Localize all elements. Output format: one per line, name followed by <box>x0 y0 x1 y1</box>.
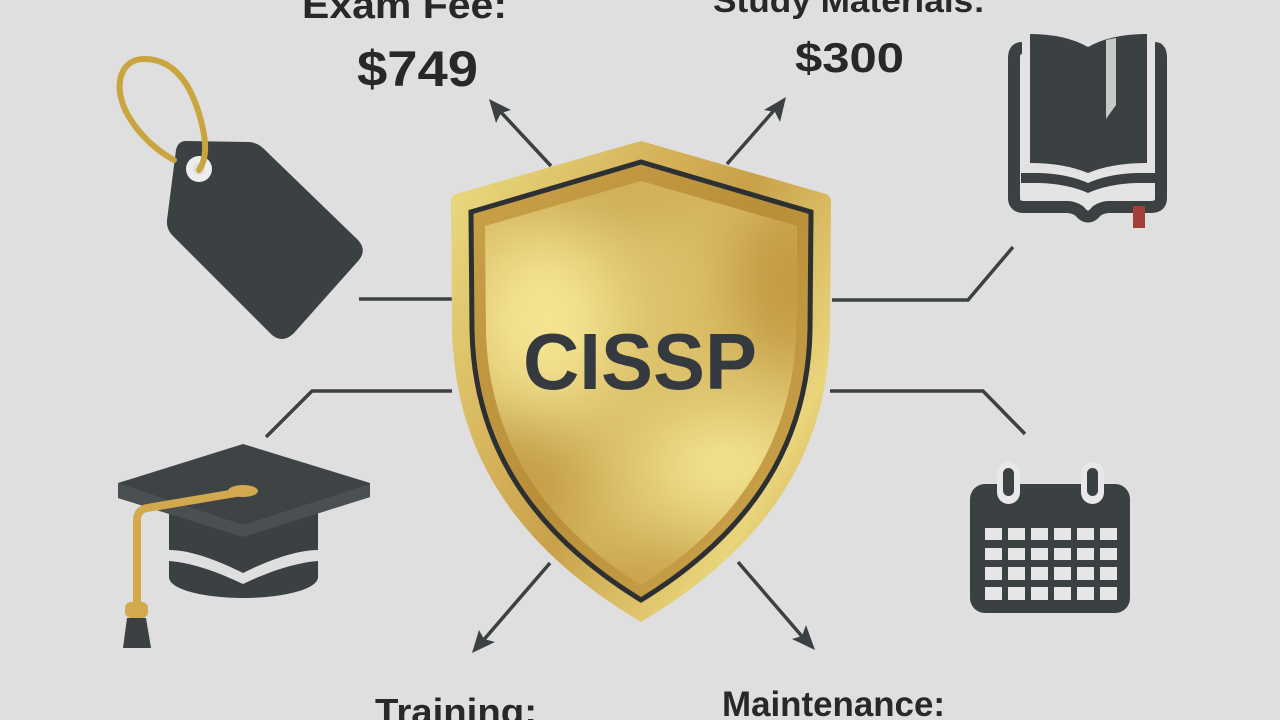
icon: graduation cap <box>118 444 370 648</box>
cap tassel cord <box>137 491 250 606</box>
tag body <box>167 141 363 339</box>
shield label: CISSP <box>523 317 757 406</box>
connector: bottom right <box>830 391 1025 434</box>
calendar rings <box>1003 468 1014 496</box>
tag hole <box>186 156 212 182</box>
connector: bottom left <box>266 391 452 437</box>
arrow: training <box>472 563 550 653</box>
book lower band <box>1021 173 1156 193</box>
book gap <box>1022 42 1155 172</box>
book page block <box>1030 34 1147 173</box>
connector: top left <box>359 297 452 301</box>
book ribbon <box>1133 206 1145 228</box>
shield inner face <box>485 181 797 585</box>
connector: top right <box>832 247 1013 300</box>
book cover outline <box>1014 48 1161 216</box>
calendar ring holes <box>997 462 1020 504</box>
icon: price tag <box>120 59 363 339</box>
cap board <box>118 444 370 537</box>
bookmark highlight <box>1106 38 1116 119</box>
cap lower band <box>169 561 318 598</box>
shield <box>451 141 831 622</box>
arrow: exam fee <box>489 99 551 166</box>
arrow: study materials <box>727 97 786 164</box>
cap tassel knob <box>125 602 148 618</box>
value: study materials: $300 <box>795 34 904 81</box>
icon: open book <box>1014 34 1161 228</box>
arrow: maintenance <box>738 562 815 650</box>
tag string <box>120 59 205 170</box>
shield black outline <box>471 162 811 600</box>
calendar grid <box>985 528 1117 600</box>
cap base <box>169 510 318 573</box>
cap tassel end <box>123 618 151 648</box>
calendar body <box>970 484 1130 613</box>
value: exam fee: $749 <box>357 41 478 97</box>
icon: calendar <box>970 462 1130 613</box>
shield outer rim <box>451 141 831 622</box>
